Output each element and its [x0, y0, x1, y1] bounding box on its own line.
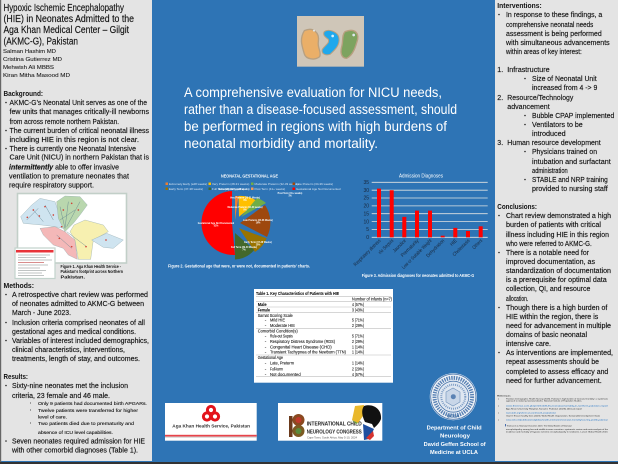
results section: absence of ICU level capabilities.	[38, 430, 113, 435]
y axis labels: 10	[363, 219, 369, 225]
conclusions section: collection, QI, and resource	[506, 286, 590, 293]
methods section: treatments, length of stay, and outcomes.	[12, 356, 140, 363]
pie data labels: Post Term (41+ weeks)	[278, 192, 303, 195]
results section: Sixty-nine neonates met the inclusion	[12, 383, 128, 390]
references: www.who.int/publications/global-health-estimates/neonatal-mortality/country-profile-pakistan	[506, 419, 608, 422]
background section: intermittently able to offer invasive	[9, 164, 119, 172]
background section: from across remote northern Pakistan.	[10, 119, 119, 126]
table rows: -	[265, 372, 267, 377]
background section: ventilation to premature neonates that	[9, 174, 129, 180]
table rows: Number of infants (n=7)	[352, 297, 392, 302]
logo: Aga Khan Health Service: Aga Khan Health Service, Pakistan	[172, 424, 250, 428]
headline statement: neonatal morbidity and mortality.	[184, 136, 378, 151]
figure 3 caption: Figure 3. Admission diagnoses for neonates admitted to AKMC-G	[362, 273, 475, 278]
x axis labels: Others	[471, 238, 484, 251]
conclusions section: There is a notable need for	[506, 250, 590, 257]
references: encephalopathy among low and middle income countries: systematic review and meta-analysis of the	[506, 428, 608, 431]
interventions section: increased from 4 -> 9	[532, 85, 597, 92]
interventions section	[497, 1, 614, 193]
logo: UCLA seal: UCLA	[447, 414, 460, 418]
references	[497, 396, 609, 434]
table rows	[258, 297, 392, 377]
background section: including HIE in this region is not clear.	[10, 137, 139, 144]
conclusions section: domains of basic neonatal	[506, 332, 587, 339]
x axis labels: Dehydration	[425, 238, 446, 259]
x axis labels: Prematurity	[400, 238, 421, 259]
interventions section: administration	[532, 168, 568, 175]
interventions section: comprehensive neonatal needs	[506, 22, 594, 29]
x axis labels	[353, 238, 484, 271]
y axis labels	[363, 180, 369, 241]
conclusions section: As interventions are implemented,	[506, 350, 613, 357]
pie data labels	[198, 188, 303, 251]
background section: require respiratory support.	[9, 182, 94, 190]
figure 1 caption	[60, 264, 123, 280]
pie chart legend: Gestational Age Not Documented	[296, 187, 341, 191]
pie data labels: 7%	[242, 249, 246, 251]
title: Hypoxic Ischemic Encephalopathy	[4, 3, 124, 14]
interventions section: advancement	[507, 104, 550, 111]
pie data labels: 52%	[214, 225, 218, 227]
conclusions section: improved documentation, as	[506, 259, 596, 266]
logo: International Child Neurology Congress: NEUROLOGY CONGRESS	[307, 429, 362, 435]
table rows: Late, Preterm	[270, 360, 294, 365]
table rows: Moderate HIE	[270, 323, 295, 328]
table rows: 5 (71%)	[352, 334, 364, 339]
conclusions section: standardization of documentation	[506, 268, 611, 275]
methods section: A retrospective chart review was performed	[12, 292, 148, 299]
table rows: -	[265, 323, 267, 328]
conclusions section: completed to assess efficacy and	[506, 369, 608, 376]
table rows: Congenital Heart Disease (CHD)	[270, 344, 332, 349]
authors: Salman Hashim MD	[3, 49, 56, 55]
table rows: Mild HIE	[270, 318, 285, 323]
table rows: -	[265, 339, 267, 344]
methods section: March - June 2023.	[12, 310, 71, 317]
logo: International Child Neurology Congress: INTERNATIONAL CHILD	[307, 422, 362, 428]
authors: Kiran Mitha Masood MD	[3, 73, 70, 79]
map legend inset	[15, 248, 55, 278]
interventions section: within areas of key interest:	[505, 49, 582, 56]
pie chart legend: Early Term (37-38 weeks)	[169, 187, 203, 191]
pie data labels: 6%	[243, 200, 247, 202]
interventions section: STABLE and NRP training	[532, 177, 608, 184]
pie data labels: Early Term (37-38 Weeks)	[244, 242, 272, 244]
pie chart legend	[166, 182, 341, 191]
conclusions section: HIE within the region, there is	[506, 314, 599, 321]
references: www.akdn.org/where-we-work/south-asia/pakistan	[506, 412, 556, 415]
bar chart title: Admission Diagnoses	[399, 173, 443, 179]
table rows: 1 (14%)	[352, 360, 364, 365]
headline statement: be performed in regions with high burdens of	[184, 119, 447, 134]
conclusions section: Conclusions:	[497, 202, 537, 211]
table rows: Female	[258, 308, 270, 313]
methods section	[4, 281, 149, 363]
pie data labels: Moderate Preterm (32-33 weeks)	[227, 206, 263, 209]
methods section: clinical characteristics, interventions,	[12, 347, 125, 354]
pie data labels: 1%	[288, 195, 292, 197]
table rows: 1 (14%)	[352, 350, 364, 355]
references: Aga Khan University Hospital, Karachi; Pakistan (2023). Annual report	[506, 408, 583, 411]
conclusions section: need for advancement in multiple	[506, 323, 611, 330]
pie data labels: Very Preterm (28-31 Weeks)	[230, 196, 260, 200]
references: References	[497, 396, 511, 398]
table rows: Full-term	[270, 367, 283, 372]
conclusions section: need for further advancement.	[506, 378, 602, 385]
pie data labels: 8%	[243, 209, 247, 211]
conclusions section	[497, 202, 613, 385]
conclusions section: burden of patients with critical	[506, 222, 601, 229]
bar chart: admission diagnoses	[353, 173, 488, 271]
x axis labels: Cholestasis	[452, 238, 472, 258]
figure 1 caption: Figure 1. Aga Khan Health Service -	[60, 264, 122, 269]
conclusions section: allocation.	[506, 296, 528, 303]
y axis labels: 0	[366, 235, 369, 241]
title: (AKMC-G), Pakistan	[4, 36, 78, 48]
table title: Table 1. Key Characteristics of Patients with HIE	[256, 291, 339, 296]
table rows: Gestational Age	[258, 355, 283, 360]
methods section: of neonates admitted to AKMC-G between	[12, 301, 144, 308]
results section: with other comorbid diagnoses (Table 1).	[11, 448, 138, 454]
background section: The current burden of critical neonatal illness	[10, 128, 149, 135]
bars	[377, 189, 483, 237]
department text: Medicine at UCLA	[430, 450, 478, 456]
pie data labels: 16%	[256, 222, 260, 224]
table rows: -	[265, 360, 267, 365]
pie data labels: Extremely Early (≤28 weeks)	[219, 188, 250, 191]
authors	[3, 49, 70, 79]
title	[4, 3, 134, 48]
interventions section: Physicians trained on	[532, 149, 597, 156]
interventions section: 2.	[497, 95, 503, 102]
logo: UCLA seal	[430, 373, 477, 420]
interventions section: In response to these findings, a	[506, 12, 602, 19]
background section: There is currently one Neonatal Intensive	[10, 146, 136, 153]
interventions section: introduced	[532, 131, 566, 138]
interventions section: Infrastructure	[507, 67, 550, 74]
table rows: 2 (29%)	[352, 367, 364, 372]
pie chart legend: Extremely Early (≤28 weeks)	[169, 182, 207, 186]
pie chart: neonatal gestational age	[166, 174, 341, 260]
figure 2 caption: Figure 2. Gestational age that were, or were not, documented in patients' charts.	[168, 264, 310, 268]
conclusions section: Chart review demonstrated a high	[506, 213, 611, 220]
interventions section: Human resource development	[507, 140, 601, 147]
logo: International Child Neurology Congress: Cape Town, South Africa, May 5-10, 2024	[307, 436, 358, 440]
results section: Seven neonates required admission for HIE	[12, 438, 145, 446]
x axis labels: Low or Suitable Weight	[401, 238, 434, 271]
x axis labels: HIE	[449, 238, 459, 248]
y axis labels: 15	[363, 211, 369, 217]
table rows: Transient Tachypnea of the Newborn (TTN)	[270, 350, 346, 355]
pie chart legend: Full Term (39-40 weeks)	[212, 187, 244, 191]
x axis labels: Jaundice	[392, 238, 408, 254]
table rows: 1 (14%)	[352, 344, 364, 349]
background section: Background:	[4, 89, 43, 98]
pie slices	[201, 191, 270, 260]
conclusions section: intensive care.	[506, 341, 551, 348]
references: www.thenews.com.pk/print/1143145-neonatal-mortality-in-northern-pakistan-report	[506, 405, 609, 408]
table rows: Male	[258, 302, 267, 307]
table rows: 4 (57%)	[352, 302, 364, 307]
x axis labels: Respiratory distress	[353, 238, 383, 268]
interventions section: 3.	[497, 140, 503, 147]
department text: Department of Child	[427, 426, 482, 432]
department text	[424, 426, 486, 456]
interventions section: Bubble CPAP implemented	[532, 113, 614, 120]
logo: Aga Khan Health Service	[165, 403, 257, 441]
panel: left column	[0, 0, 152, 462]
y axis labels: 30	[363, 188, 369, 194]
results section: Two patients died due to prematurity and	[38, 421, 135, 426]
pie chart title: NEONATAL GESTATIONAL AGE	[221, 174, 278, 178]
authors: Mehwish Ali MBBS	[3, 65, 55, 71]
pie chart legend: Moderate Preterm (32-33 weeks)	[254, 182, 299, 186]
title: Aga Khan Medical Center – Gilgit	[4, 25, 129, 36]
pie chart legend: Very Preterm (28-31 weeks)	[212, 182, 249, 186]
interventions section: Resource/Technology	[507, 95, 574, 102]
table rows: Comorbid Condition(s)	[258, 329, 298, 334]
background section: AKMC-G's Neonatal Unit serves as one of the	[10, 100, 147, 107]
y axis labels: 25	[363, 196, 369, 202]
pie chart legend: Late Preterm (34-36 weeks)	[296, 182, 333, 186]
image: three footprint cookies	[297, 16, 364, 67]
table rows: 3 (43%)	[352, 308, 364, 313]
results section: Results:	[4, 372, 28, 381]
headline statement: rather than a disease-focused assessment, should	[184, 102, 457, 117]
y axis labels: 35	[363, 180, 369, 186]
methods section: Variables of interest included demographics,	[12, 338, 149, 345]
interventions section: Ventilators to be	[532, 122, 583, 129]
table rows: 5 (71%)	[352, 318, 364, 323]
interventions section: Size of Neonatal Unit	[532, 76, 597, 83]
pie data labels: 10%	[256, 244, 260, 246]
methods section: gestational ages and medical conditions.	[12, 329, 136, 336]
results section: level of care.	[38, 414, 67, 420]
x axis labels: r/o Sepsis	[377, 238, 395, 256]
headline statement	[184, 85, 457, 151]
department text: Neurology	[440, 434, 471, 440]
department text: David Geffen School of	[424, 442, 486, 448]
background section: Care Unit (NICU) in northern Pakistan that is	[10, 154, 150, 162]
references: Thomas et al, Neonatal Outcomes 2023. The Global Burden of Neonatal	[506, 424, 572, 427]
conclusions section: who were referred to AKMC-G.	[505, 241, 592, 248]
table rows: -	[265, 367, 267, 372]
figure 1 caption: Pakistan.	[60, 274, 85, 280]
interventions section: assessment is being performed	[506, 31, 602, 38]
results section: criteria, 23 female and 46 male.	[12, 393, 110, 400]
title: (HIE) in Neonates Admitted to the	[4, 14, 134, 25]
table 1: key characteristics	[254, 289, 393, 383]
interventions section: Interventions:	[497, 1, 542, 10]
figure 1 caption: Pakistan's footprint across Northern	[60, 269, 123, 274]
panel: right column	[495, 0, 618, 461]
pie data labels: Full Term (39-40 Weeks)	[231, 246, 257, 249]
interventions section: 1.	[497, 67, 503, 74]
conclusions section: Though there is a high burden of	[506, 305, 607, 312]
background section: few units that manages critically-ill newborns	[10, 109, 149, 116]
table rows: Rule-out Sepsis	[270, 334, 293, 339]
results section: Only 9 patients had documented birth APGARs.	[38, 401, 147, 406]
interventions section: provided to nursing staff	[532, 186, 608, 193]
background section	[4, 89, 150, 190]
table rows: 4 (57%)	[352, 372, 364, 377]
pie chart legend: Post Term (41+ weeks)	[254, 187, 285, 191]
table rows: 2 (29%)	[352, 323, 364, 328]
results section: Twelve patients were transferred for higher	[38, 408, 139, 413]
y axis labels: 20	[363, 204, 369, 210]
methods section: Inclusion criteria comprised neonates of all	[12, 320, 145, 327]
authors: Cristina Gutierrez MD	[3, 57, 62, 63]
references: incidence and mortality of hypoxic ischemic encephalopathy in newborns. Lancet Global Health 2023.	[506, 431, 609, 434]
references: Pakistan Demographic Health Survey (2018). Pakistan's high burden of neonatal mortality: a systematic	[506, 398, 608, 400]
interventions section: with simultaneous advancements	[505, 40, 610, 47]
table rows: -	[265, 344, 267, 349]
conclusions section: repeat assessments should be	[506, 359, 599, 366]
results section	[4, 372, 147, 454]
methods section: Methods:	[4, 281, 34, 290]
y axis labels: 5	[366, 227, 369, 233]
pie data labels: Gestational Age Not Documented	[198, 222, 235, 225]
table rows: -	[265, 334, 267, 339]
figure 1: map of Pakistan footprint	[15, 194, 126, 278]
conclusions section: is a prerequisite for optimal data	[506, 277, 607, 284]
table rows: Respiratory Distress Syndrome (RDS)	[270, 339, 335, 344]
table rows: Sarnat Scoring Scale	[258, 313, 293, 318]
pie data labels: Late Preterm (34-36 Weeks)	[243, 219, 273, 222]
logo: International Child Neurology Congress	[278, 403, 382, 441]
table rows: -	[265, 318, 267, 323]
interventions section: intubation and surfactant	[532, 159, 611, 166]
conclusions section: illness including HIE in this region	[506, 232, 609, 239]
table rows: Not documented	[270, 372, 301, 377]
references: Goal 3: Ensure healthy lives (2023). World Health Organization. Sustainable Development Goals	[506, 414, 600, 417]
headline statement: A comprehensive evaluation for NICU needs,	[184, 85, 442, 100]
table rows: -	[265, 350, 267, 355]
table rows: 2 (29%)	[352, 339, 364, 344]
references: approach to reducing neonatal deaths. National Institute of Population Studies.	[506, 400, 583, 403]
